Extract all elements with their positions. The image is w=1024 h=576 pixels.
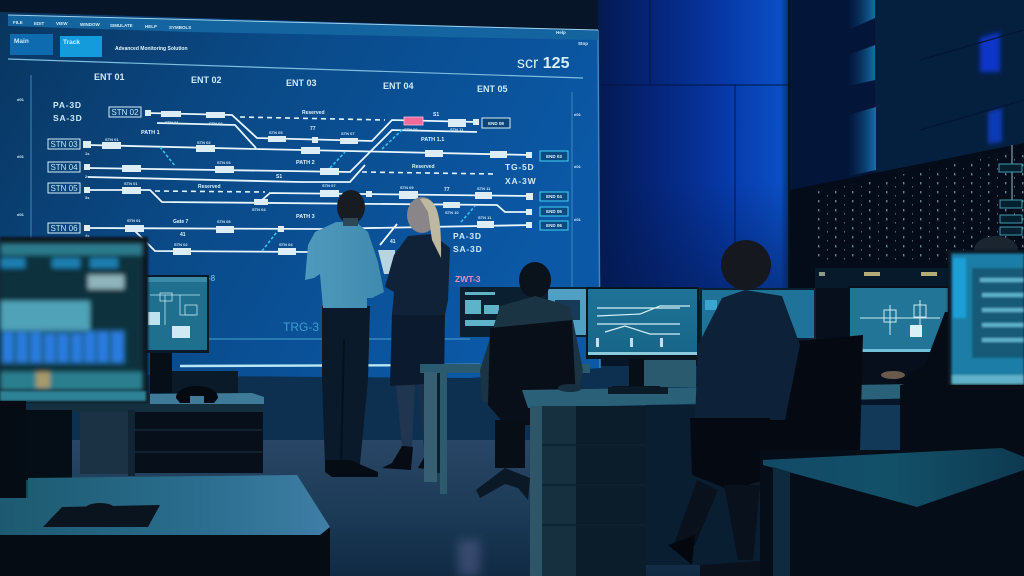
path and reserved labels: PATH 1.1 bbox=[421, 137, 444, 143]
wall below the screen bbox=[0, 366, 790, 440]
small station captions: STN 03 bbox=[209, 121, 223, 126]
path and reserved labels: Reserved bbox=[302, 110, 325, 116]
small station captions: STN 04 bbox=[279, 242, 293, 247]
menu bar: FILE bbox=[13, 20, 23, 25]
dark server matrix wall with indicator dots bbox=[790, 143, 1024, 300]
side labels: SA-3D bbox=[53, 113, 83, 123]
headphones bbox=[176, 386, 218, 403]
station labels: STN 02 bbox=[111, 108, 139, 117]
entry column headings: ENT 05 bbox=[477, 84, 508, 94]
left monitor stand bbox=[0, 401, 26, 506]
seated woman and chair bbox=[668, 240, 863, 576]
end point labels: END 03 bbox=[546, 154, 562, 159]
small station captions: STN 01 bbox=[127, 218, 141, 223]
path and reserved labels: Gate 7 bbox=[173, 219, 189, 225]
keyboard and mouse bbox=[558, 384, 668, 394]
small station captions: STN 07 bbox=[341, 131, 355, 136]
standing woman bbox=[382, 197, 450, 470]
end point labels: END 08 bbox=[488, 121, 504, 126]
monitor behind standing-back woman bbox=[700, 288, 816, 340]
small station captions: STN 11 bbox=[477, 186, 491, 191]
menu bar: VIEW bbox=[56, 21, 68, 26]
screen fragment -8: -8 bbox=[208, 274, 216, 283]
path and reserved labels: Reserved bbox=[412, 164, 435, 170]
menu bar: WINDOW bbox=[80, 22, 100, 27]
dark column between monitors bbox=[816, 288, 848, 388]
small station captions: STN 05 bbox=[217, 219, 231, 224]
menu bar: HELP bbox=[145, 24, 157, 29]
side labels: PA-3D bbox=[453, 231, 482, 241]
blurred foreground right monitor bbox=[948, 250, 1024, 386]
entry column headings: ENT 03 bbox=[286, 78, 317, 88]
small station captions: STN 01 bbox=[124, 181, 138, 186]
end point labels: END 04 bbox=[546, 194, 562, 199]
screen id: scr 125 bbox=[517, 55, 570, 72]
tablet held between the two people bbox=[378, 250, 395, 274]
monitor with schematic bbox=[848, 286, 950, 386]
station labels: STN 03 bbox=[50, 140, 78, 149]
axis tick labels: d01 bbox=[17, 154, 25, 159]
entry column headings: ENT 01 bbox=[94, 72, 125, 82]
side labels: XA-3W bbox=[505, 176, 537, 186]
entry column headings: ENT 02 bbox=[191, 75, 222, 85]
small station captions: 3s bbox=[85, 195, 90, 200]
menu bar: Help bbox=[556, 30, 566, 35]
main tab button: Main bbox=[14, 38, 29, 45]
small station captions: STN 03 bbox=[217, 160, 231, 165]
monitor stand bbox=[612, 359, 660, 391]
track tab button: Track bbox=[63, 39, 80, 46]
path and reserved labels: 41 bbox=[180, 232, 186, 238]
side labels: SA-3D bbox=[453, 244, 483, 254]
axis tick labels: d01 bbox=[574, 164, 582, 169]
small station captions: STN 07 bbox=[322, 183, 336, 188]
centre table bbox=[420, 364, 590, 494]
track diagram bbox=[88, 113, 532, 252]
right operator silhouette bbox=[881, 236, 1018, 450]
monitor with track diagram bbox=[586, 287, 699, 359]
path and reserved labels: S1 bbox=[433, 112, 439, 118]
dark louvered wall with blue glow bbox=[788, 0, 1024, 290]
menu bar: Stop bbox=[578, 41, 588, 46]
small station captions: STN 11 bbox=[450, 127, 464, 132]
highlighted alarm segment bbox=[404, 117, 423, 125]
blue wall panels right of the screen bbox=[598, 0, 790, 300]
axis tick labels: d01 bbox=[17, 212, 25, 217]
path and reserved labels: 77 bbox=[444, 187, 450, 193]
screen tag TRG-3: TRG-3 bbox=[283, 320, 319, 334]
side labels bbox=[53, 100, 537, 254]
small station captions: 1s bbox=[85, 151, 90, 156]
path and reserved labels: PATH 3 bbox=[296, 214, 315, 220]
floor bbox=[0, 440, 1024, 576]
standing man bbox=[305, 190, 384, 477]
solution heading: Advanced Monitoring Solution bbox=[115, 46, 188, 52]
seated operator bbox=[476, 262, 583, 500]
side labels: TG-5D bbox=[505, 162, 534, 172]
menu bar: SYMBOLS bbox=[169, 25, 191, 30]
small station captions: STN 09 bbox=[404, 127, 418, 132]
path and reserved labels: PATH 2 bbox=[296, 160, 315, 166]
screen tag ZWT-3: ZWT-3 bbox=[455, 274, 481, 284]
end point labels: END 05 bbox=[546, 209, 562, 214]
small station captions: 2s bbox=[85, 174, 90, 179]
blurred foreground left monitor bbox=[0, 237, 148, 402]
floor reflection bbox=[458, 540, 480, 576]
menu bar bbox=[8, 15, 598, 46]
small station captions: STN 04 bbox=[252, 207, 266, 212]
small station captions: STN 11 bbox=[478, 215, 492, 220]
station labels: STN 04 bbox=[50, 163, 78, 172]
small station captions: 4s bbox=[85, 233, 90, 238]
axis tick labels: d01 bbox=[17, 97, 25, 102]
entry column headings bbox=[94, 72, 508, 94]
entry column headings: ENT 04 bbox=[383, 81, 414, 91]
small station captions: STN 01 bbox=[105, 137, 119, 142]
side labels: PA-3D bbox=[53, 100, 82, 110]
path and reserved labels: 41 bbox=[390, 239, 396, 245]
back left desk bbox=[20, 393, 264, 480]
track segment blocks bbox=[83, 110, 533, 255]
path and reserved labels: PATH 1 bbox=[141, 130, 160, 136]
main tab button bbox=[10, 34, 53, 55]
small monitor stand bbox=[150, 353, 238, 393]
end point labels bbox=[482, 118, 568, 230]
monitor behind seated person bbox=[460, 287, 587, 337]
equipment behind the desk bbox=[644, 360, 696, 387]
station labels bbox=[48, 107, 141, 233]
axis tick labels: d01 bbox=[574, 112, 582, 117]
small station captions: STN 02 bbox=[197, 140, 211, 145]
right foreground desk bbox=[760, 385, 1024, 576]
small station captions: STN 02 bbox=[174, 242, 188, 247]
axis tick labels: d01 bbox=[574, 217, 582, 222]
small station captions: STN 10 bbox=[445, 210, 459, 215]
station labels: STN 05 bbox=[50, 184, 78, 193]
path and reserved labels: Reserved bbox=[198, 184, 221, 190]
station labels: STN 06 bbox=[50, 224, 78, 233]
small station captions bbox=[85, 120, 492, 247]
path and reserved labels: 77 bbox=[310, 126, 316, 132]
small station captions: STN 09 bbox=[400, 185, 414, 190]
small station captions: STN 01 bbox=[165, 120, 179, 125]
menu bar: EDIT bbox=[34, 21, 45, 26]
path and reserved labels bbox=[141, 110, 450, 245]
menu bar: SIMULATE bbox=[110, 23, 133, 28]
main operator desk bbox=[522, 384, 925, 576]
end point labels: END 06 bbox=[546, 223, 562, 228]
track tab button bbox=[60, 36, 102, 57]
small station captions: STN 05 bbox=[269, 130, 283, 135]
axis tick labels bbox=[17, 97, 582, 222]
small left monitor bbox=[145, 275, 209, 353]
path and reserved labels: S1 bbox=[276, 174, 282, 180]
main video wall screen bbox=[0, 12, 600, 378]
front left desk bbox=[0, 475, 330, 576]
